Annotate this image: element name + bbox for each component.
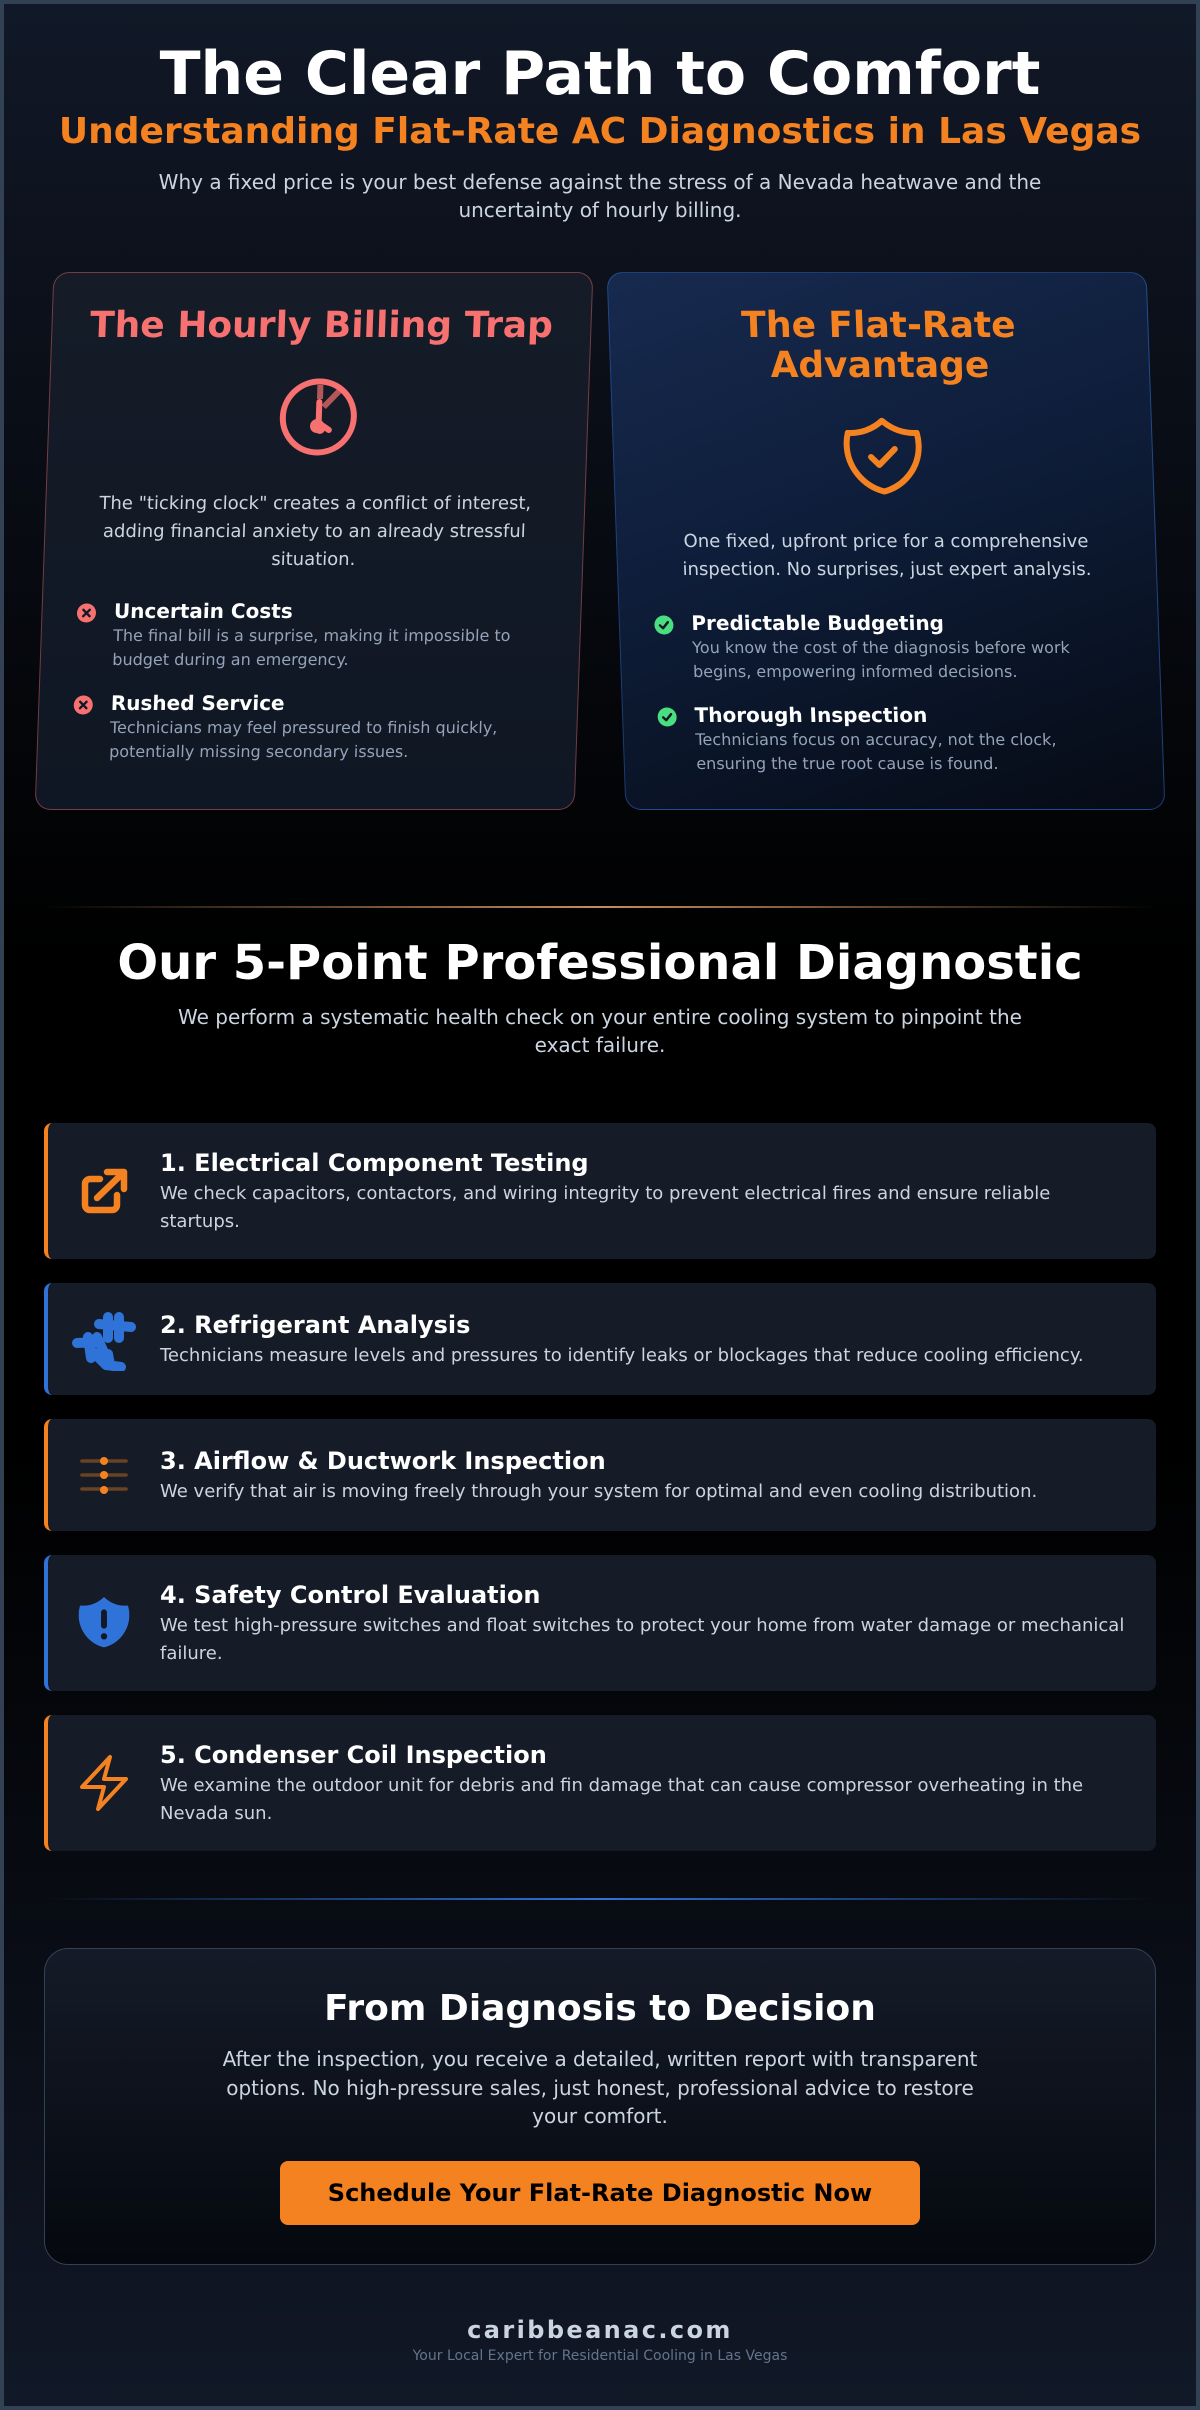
icon: check mark xyxy=(654,616,674,634)
bullet title: Uncertain Costs xyxy=(114,599,293,623)
CTA button: Schedule Your Flat-Rate Diagnostic Now xyxy=(328,2179,872,2207)
bullet: rushed service xyxy=(74,691,498,761)
step 5: condenser xyxy=(44,1715,1156,1851)
bullet description: Technicians may feel pressured to finish quickly, xyxy=(110,718,498,737)
step description xyxy=(160,1775,1083,1824)
icon: ticking clock xyxy=(280,378,357,456)
step 4: safety xyxy=(44,1555,1156,1691)
bullet description: budget during an emergency. xyxy=(112,650,349,669)
CTA button xyxy=(280,2161,920,2225)
step 1: electrical xyxy=(44,1123,1156,1259)
step title: 2. Refrigerant Analysis xyxy=(160,1311,470,1339)
bullet description xyxy=(695,730,1057,773)
paragraph: flat-rate: inspection. No surprises, just expert analysis. xyxy=(682,559,1092,580)
paragraph: flat-rate: One fixed, upfront price for a comprehensive xyxy=(683,531,1089,552)
icon: sliders xyxy=(80,1457,128,1494)
heading: flat-rate advantage: Advantage xyxy=(770,345,990,386)
section intro: exact failure. xyxy=(535,1033,665,1057)
panel: flat-rate advantage xyxy=(607,272,1165,810)
title: The Clear Path to Comfort xyxy=(160,39,1040,109)
CTA text: options. No high-pressure sales, just honest, professional advice to restore xyxy=(226,2076,974,2100)
step description xyxy=(160,1183,1050,1232)
paragraph: flat-rate xyxy=(682,531,1092,580)
step description: Technicians measure levels and pressures to identify leaks or blockages that reduce cooling efficiency. xyxy=(160,1345,1084,1366)
step 3: airflow xyxy=(44,1419,1156,1531)
bullet description: You know the cost of the diagnosis before work xyxy=(692,638,1070,657)
step description xyxy=(160,1615,1124,1664)
step description: We test high-pressure switches and float switches to protect your home from water damage or mechanical xyxy=(160,1615,1124,1636)
section intro xyxy=(178,1005,1022,1057)
paragraph: ticking clock: The "ticking clock" creates a conflict of interest, xyxy=(99,493,532,514)
icon: x mark xyxy=(77,604,96,622)
bullet description xyxy=(109,718,498,761)
step title: 5. Condenser Coil Inspection xyxy=(160,1741,547,1769)
step description: failure. xyxy=(160,1643,223,1664)
bullet title: Thorough Inspection xyxy=(694,703,928,727)
icon: lightning bolt xyxy=(80,1754,128,1812)
bullet title: Rushed Service xyxy=(110,691,285,715)
bullet description: potentially missing secondary issues. xyxy=(109,742,409,761)
bullet description: Technicians focus on accuracy, not the clock, xyxy=(695,730,1057,749)
bullet: thorough inspection xyxy=(658,703,1057,773)
CTA text xyxy=(222,2047,977,2128)
step title: 1. Electrical Component Testing xyxy=(160,1149,589,1177)
header xyxy=(59,39,1141,222)
icon: x mark xyxy=(74,696,93,714)
step description: startups. xyxy=(160,1211,240,1232)
paragraph: ticking clock: adding financial anxiety to an already stressful xyxy=(103,521,526,542)
CTA heading: From Diagnosis to Decision xyxy=(324,1988,876,2029)
CTA text: After the inspection, you receive a detailed, written report with transparent xyxy=(223,2047,977,2071)
intro text: uncertainty of hourly billing. xyxy=(458,198,742,222)
icon: shield alert xyxy=(78,1597,130,1648)
intro text xyxy=(159,170,1041,222)
bullet: predictable budgeting xyxy=(654,611,1070,681)
section heading: 5-point diagnostic: Our 5-Point Professional Diagnostic xyxy=(117,935,1083,991)
panel: call to action xyxy=(44,1948,1156,2265)
heading: flat-rate advantage: The Flat-Rate xyxy=(741,305,1016,346)
panel: hourly billing trap xyxy=(35,272,593,810)
icon: refrigerant blob xyxy=(72,1312,136,1371)
step description: We examine the outdoor unit for debris and fin damage that can cause compressor overheating in the xyxy=(160,1775,1083,1796)
step title: 3. Airflow & Ductwork Inspection xyxy=(160,1447,606,1475)
bullet description xyxy=(112,626,511,669)
icon: shield check xyxy=(844,418,922,494)
bullet description: begins, empowering informed decisions. xyxy=(693,662,1018,681)
step description: We verify that air is moving freely through your system for optimal and even cooling distribution. xyxy=(160,1481,1037,1502)
bullet description: The final bill is a surprise, making it impossible to xyxy=(113,626,511,645)
section intro: We perform a systematic health check on your entire cooling system to pinpoint the xyxy=(178,1005,1022,1029)
paragraph: ticking clock xyxy=(99,493,532,570)
intro text: Why a fixed price is your best defense against the stress of a Nevada heatwave and the xyxy=(159,170,1041,194)
CTA text: your comfort. xyxy=(532,2104,668,2128)
step 2: refrigerant xyxy=(44,1283,1156,1395)
paragraph: ticking clock: situation. xyxy=(271,549,356,570)
step title: 4. Safety Control Evaluation xyxy=(160,1581,540,1609)
icon: external link xyxy=(82,1168,128,1214)
footer xyxy=(412,2316,787,2364)
heading: hourly billing trap: The Hourly Billing Trap xyxy=(89,305,554,346)
bullet description: ensuring the true root cause is found. xyxy=(696,754,999,773)
bullet: uncertain costs xyxy=(77,599,511,669)
icon: check mark xyxy=(658,708,677,726)
footer domain: caribbeanac.com xyxy=(467,2316,733,2344)
step description: Nevada sun. xyxy=(160,1803,272,1824)
subtitle: Understanding Flat-Rate AC Diagnostics in Las Vegas xyxy=(59,111,1141,152)
step description: We check capacitors, contactors, and wiring integrity to prevent electrical fires and ensure reliable xyxy=(160,1183,1050,1204)
bullet description xyxy=(692,638,1070,681)
heading: flat-rate advantage xyxy=(741,305,1016,386)
footer tagline: Your Local Expert for Residential Cooling in Las Vegas xyxy=(413,2348,787,2364)
bullet title: Predictable Budgeting xyxy=(691,611,944,635)
